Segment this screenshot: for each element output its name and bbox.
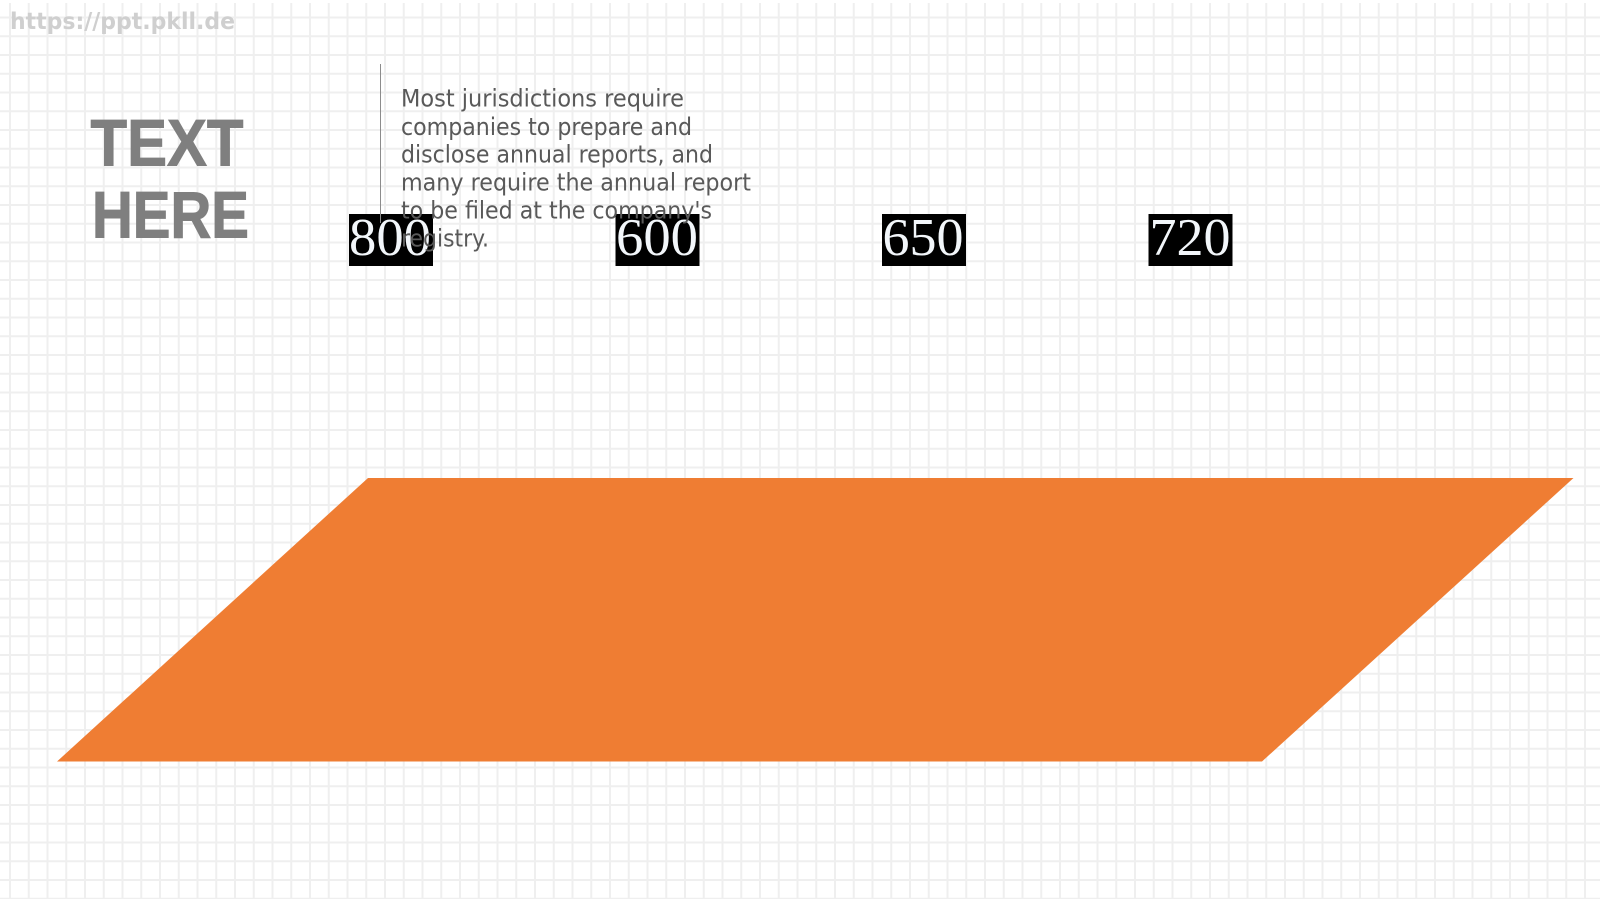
orange parallelogram	[57, 478, 1574, 762]
title: TEXT	[90, 107, 244, 180]
body text block	[401, 85, 751, 253]
title: HERE	[92, 178, 249, 251]
body text block: Most jurisdictions require	[401, 85, 684, 113]
number box: 800: 800	[349, 209, 431, 267]
title	[90, 107, 249, 251]
body text block: to be filed at the company's	[401, 197, 712, 225]
body text block: many require the annual report	[401, 169, 751, 197]
number box: 650: 650	[882, 209, 964, 267]
number box: 600: 600	[616, 209, 698, 267]
body text block: registry.	[401, 225, 489, 253]
body text block: disclose annual reports, and	[401, 141, 713, 169]
watermark url: https://ppt.pkll.de	[10, 9, 235, 35]
number box: 720: 720	[1150, 209, 1230, 267]
vertical divider line	[380, 64, 382, 223]
body text block: companies to prepare and	[401, 113, 692, 141]
